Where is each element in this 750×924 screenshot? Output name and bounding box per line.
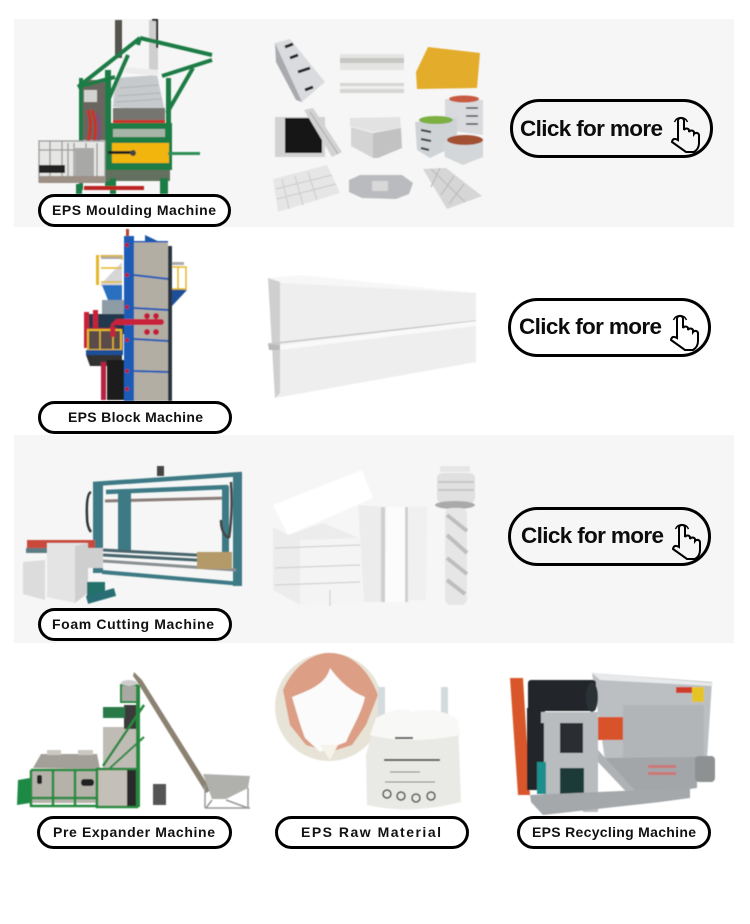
products: moulded foam items (273, 39, 483, 212)
label: EPS Recycling Machine: EPS Recycling Machine (532, 824, 696, 840)
product: TV packaging (275, 108, 342, 157)
button: click for more 3: Click for more (521, 523, 664, 548)
label: EPS Moulding Machine (40, 196, 230, 226)
panel: EPS raw material (275, 653, 468, 848)
label: Foam Cutting Machine: Foam Cutting Machine (52, 616, 214, 632)
product: EPS foam blocks (268, 275, 476, 398)
button: click for more 2 (510, 300, 710, 356)
icon: pointing hand (672, 118, 699, 152)
machine: EPS block machine (84, 229, 187, 401)
label: EPS Block Machine (40, 402, 230, 432)
button: click for more 1 (512, 100, 712, 156)
product: bottom panels (273, 165, 482, 212)
label: Foam Cutting Machine (40, 610, 230, 640)
product: foam boards and spiral column (273, 466, 475, 606)
icon: pointing hand (671, 316, 698, 350)
button: click for more 2: Click for more (519, 314, 662, 339)
product: cornice trims (340, 54, 404, 93)
panel: EPS recycling machine (510, 673, 715, 848)
button: click for more 1: Click for more (520, 116, 663, 141)
icon: pointing hand (673, 525, 700, 559)
panel: foam cutting machine row (14, 435, 734, 643)
machine: EPS moulding machine (39, 20, 212, 194)
machine: pre expander (17, 672, 250, 808)
label: Pre Expander Machine (38, 818, 230, 848)
label: EPS Raw Material: EPS Raw Material (301, 824, 441, 840)
label: EPS Block Machine: EPS Block Machine (68, 409, 203, 425)
product: ICF block (275, 39, 325, 102)
product: produce crates (415, 96, 483, 165)
panel: EPS moulding machine row (14, 19, 734, 227)
panel: pre expander machine (17, 672, 250, 848)
panel: EPS block machine row (14, 227, 734, 435)
button: click for more 3 (510, 508, 710, 564)
product: foam box (350, 117, 402, 158)
label: EPS Moulding Machine: EPS Moulding Machine (52, 202, 216, 218)
label: Pre Expander Machine: Pre Expander Machine (53, 824, 215, 840)
product: yellow panel (416, 47, 480, 89)
image: bulk bag of EPS (366, 687, 461, 809)
machine: foam cutting machine (23, 466, 242, 603)
label: EPS Recycling Machine (518, 818, 710, 848)
label: EPS Raw Material (276, 818, 468, 848)
machine: recycling (510, 673, 715, 815)
image: hands with beads (275, 653, 383, 761)
